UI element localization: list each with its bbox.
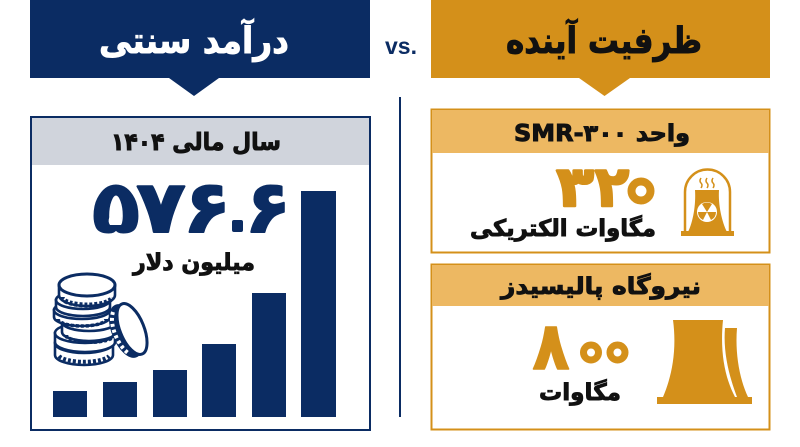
icon: coins bbox=[54, 274, 153, 365]
big revenue number: ۷ bbox=[136, 166, 186, 250]
left header title: درآمد سنتی bbox=[99, 18, 289, 62]
panel heading: SMR-300 unit bbox=[432, 110, 769, 153]
panel: SMR unit bbox=[432, 110, 770, 252]
center divider bbox=[399, 97, 401, 417]
icon: nuclear reactor bbox=[681, 170, 734, 236]
big revenue number: ۶ bbox=[245, 166, 291, 250]
big revenue number bbox=[92, 165, 291, 250]
Palisades capacity unit: مگاوات bbox=[539, 379, 621, 406]
right header title: ظرفیت آینده bbox=[506, 18, 702, 62]
SMR capacity unit: مگاوات الکتریکی bbox=[470, 215, 656, 242]
Palisades capacity number bbox=[532, 308, 633, 385]
vs label: vs. bbox=[385, 33, 417, 59]
panel heading: Palisades plant: نیروگاه پالیسیدز bbox=[500, 273, 701, 300]
SMR capacity number: ۳ bbox=[556, 154, 594, 219]
panel heading: fiscal year bbox=[32, 118, 369, 165]
left header banner bbox=[30, 0, 370, 96]
SMR capacity number: ۰ bbox=[624, 155, 658, 220]
panel heading: Palisades plant bbox=[432, 265, 769, 306]
panel: traditional revenue bbox=[31, 117, 370, 430]
revenue unit: میلیون دلار bbox=[132, 250, 255, 276]
panel heading: SMR-300 unit: واحد SMR-۳۰۰ bbox=[514, 121, 690, 147]
big revenue number: ۵ bbox=[92, 165, 140, 249]
Palisades capacity number: ۰ bbox=[602, 323, 633, 381]
panel heading: fiscal year: سال مالی ۱۴۰۴ bbox=[111, 128, 281, 156]
Palisades capacity number: ۰ bbox=[576, 323, 606, 381]
right header banner bbox=[431, 0, 770, 96]
icon: cooling towers bbox=[657, 320, 752, 404]
panel: Palisades plant bbox=[432, 264, 770, 430]
Palisades capacity number: ۸ bbox=[532, 308, 570, 385]
SMR capacity number bbox=[556, 154, 658, 220]
big revenue number: ۶ bbox=[183, 165, 231, 249]
bar chart bbox=[53, 191, 336, 417]
SMR capacity number: ۲ bbox=[595, 155, 629, 220]
